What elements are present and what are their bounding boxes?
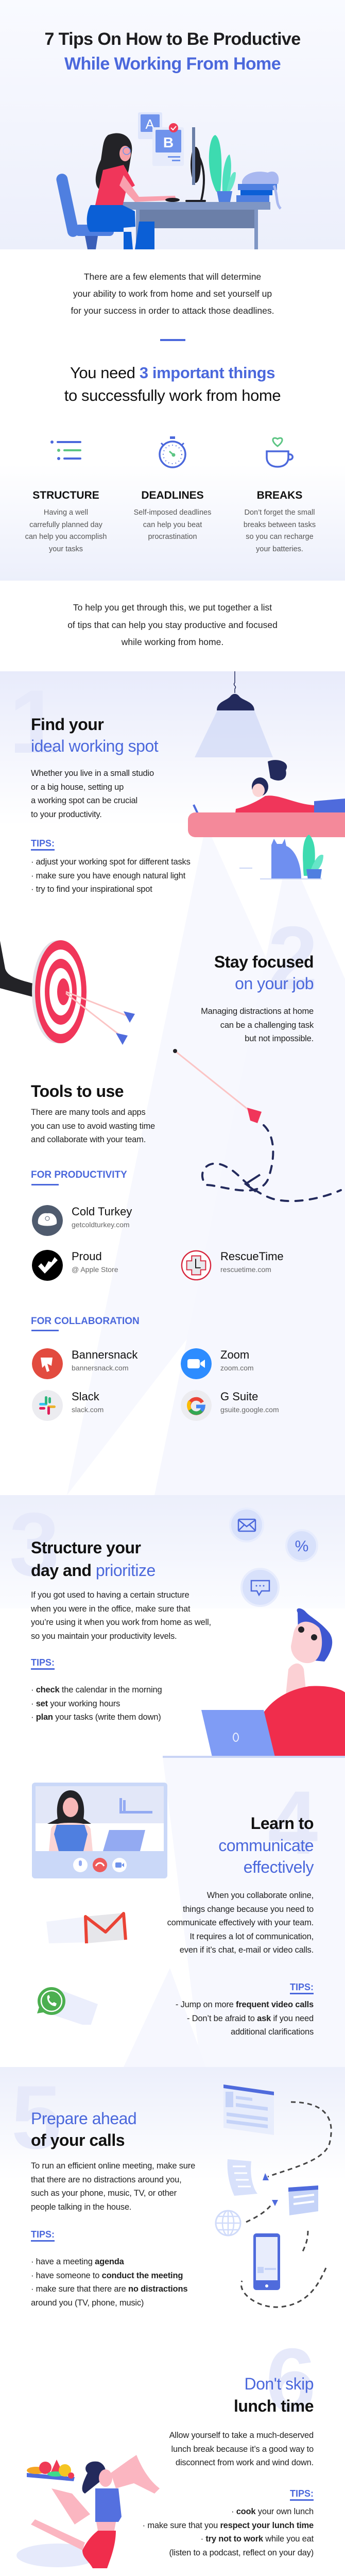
heading: three important things: to successfully work from home [64, 386, 281, 404]
illustration: devices with dashed paths [206, 2081, 345, 2313]
icon: gmail [41, 1909, 129, 1947]
tips list: · set your working hours [31, 1699, 120, 1708]
tips list [143, 2505, 314, 2560]
tips: tip 5 [31, 2229, 206, 2311]
text: tip 1 body [31, 769, 154, 819]
intro text: There are a few elements that will determine [84, 272, 261, 282]
heading: tip 2: Stay focused [214, 953, 314, 971]
heading: tip 6: Don't skip [244, 2375, 314, 2393]
text: tip 5 body: people talking in the house. [31, 2202, 131, 2211]
heading: tip 6: lunch time [234, 2397, 314, 2415]
text: tip 5 body: that there are no distractions around you, [31, 2175, 181, 2184]
title: While Working From Home [64, 54, 281, 74]
tips label: TIPS: [290, 2488, 314, 2499]
text: tip 4 body: When you collaborate online, [207, 1891, 314, 1900]
tips list: · try to find your inspirational spot [31, 885, 152, 894]
description: your tasks [49, 545, 83, 553]
background: triangles pattern 2 [124, 1969, 206, 2067]
label: STRUCTURE [32, 489, 99, 501]
tool: cold turkey: getcoldturkey.com [72, 1221, 130, 1229]
heading: tip 2: on your job [235, 974, 314, 993]
tips list: (listen to a podcast, reflect on your day) [169, 2548, 314, 2557]
tips list: · make sure that you respect your lunch time [143, 2520, 314, 2530]
background: section 5 [0, 2067, 345, 2180]
tool: rescuetime: rescuetime.com [220, 1265, 271, 1274]
tool: cold turkey: Cold Turkey [72, 1205, 132, 1218]
text: tip 2 body: Managing distractions at home [201, 1007, 314, 1016]
tips list [31, 1685, 162, 1722]
text: tips list intro [67, 602, 278, 647]
divider [160, 339, 185, 341]
icon: list [50, 440, 81, 460]
tool: zoom: zoom.com [220, 1364, 254, 1372]
illustration: video call [32, 1783, 167, 1878]
tool: proud: @ Apple Store [72, 1265, 118, 1274]
intro text: for your success in order to attack those deadlines. [71, 306, 274, 316]
heading: tip 1: ideal working spot [31, 737, 158, 755]
heading: tip 4: effectively [244, 1858, 314, 1876]
background: section 3 [0, 1495, 345, 1608]
icon: whatsapp [33, 1984, 106, 2025]
heading: tip 5: Prepare ahead [31, 2109, 136, 2128]
intro text: your ability to work from home and set yourself up [73, 289, 272, 299]
tool: rescuetime: RescueTime [220, 1250, 284, 1263]
description: your batteries. [256, 545, 303, 553]
tips list: around you (TV, phone, music) [31, 2298, 144, 2307]
heading: tip 3: day and prioritize [31, 1561, 156, 1580]
title [44, 29, 301, 74]
heading: tip 6 [234, 2373, 314, 2417]
tool: slack: Slack [72, 1390, 99, 1403]
tool: g suite: G Suite [220, 1390, 258, 1403]
subheading: for productivity: FOR PRODUCTIVITY [31, 1170, 127, 1180]
tips list: · have a meeting agenda [31, 2257, 124, 2266]
item: breaks [244, 437, 316, 553]
number 3: 3 [9, 1495, 59, 1595]
text: tip 6 body: Allow yourself to take a much-deserved [169, 2431, 314, 2440]
text: tips list intro: To help you get through this, we put together a list [73, 602, 272, 613]
description: procrastination [148, 533, 197, 541]
tips list: · adjust your working spot for different tasks [31, 857, 191, 867]
text: tips list intro: of tips that can help you stay productive and focused [67, 619, 278, 630]
background: triangles pattern 1 [154, 879, 345, 1495]
heading: tip 2 [214, 953, 314, 993]
hero illustration: woman at desk [56, 112, 282, 249]
tool: slack: slack.com [72, 1405, 104, 1414]
background: section 1 [0, 671, 345, 826]
tips label: TIPS: [31, 2229, 55, 2240]
description: can help you beat [143, 520, 202, 529]
text: tools body: you can use to avoid wasting time [31, 1121, 155, 1130]
tips list [31, 857, 191, 894]
tool: proud [32, 1250, 118, 1281]
text: tip 3 body: when you were in the office, make sure that [31, 1604, 190, 1614]
description [134, 509, 211, 541]
heading: tip 4: communicate [218, 1836, 314, 1855]
text: tip 3 body: If you got used to having a certain structure [31, 1590, 189, 1600]
text: tip 1 body: a working spot can be crucial [31, 796, 137, 805]
heading: tip 3: Structure your [31, 1538, 141, 1557]
tool: zoom: Zoom [220, 1348, 249, 1361]
heading: tip 1 [31, 715, 159, 755]
icons: email, percent, chat bubbles and man with laptop: % [295, 1538, 308, 1555]
text: tip 3 body: you’re using it when you work from home as well, [31, 1618, 211, 1627]
subheading: for productivity [31, 1170, 127, 1185]
heading: tip 4 [218, 1814, 314, 1876]
tips label: TIPS: [290, 1982, 314, 1992]
text: tip 2 body: can be a challenging task [220, 1020, 314, 1029]
tool: zoom [181, 1348, 254, 1379]
text: tip 3 body [31, 1590, 211, 1640]
tips list: - Don’t be afraid to ask if you need [187, 2013, 314, 2023]
tool: g suite: gsuite.google.com [220, 1405, 279, 1414]
number 6: 6 [266, 2330, 316, 2431]
text: tip 2 body: but not impossible. [245, 1034, 314, 1043]
number 5: 5 [11, 2067, 61, 2168]
description: breaks between tasks [244, 520, 316, 529]
number 4: 4 [268, 1773, 318, 1873]
text: tip 4 body: communicate effectively with your team. [167, 1918, 314, 1927]
tips label: TIPS: [31, 838, 55, 849]
icon: cup with heart [266, 437, 294, 468]
tips list: · make sure you have enough natural light [31, 871, 185, 880]
icons: email, percent, chat bubbles and man with laptop [163, 1510, 345, 1758]
illustration: target with arrows [0, 940, 342, 1202]
text: tools body: and collaborate with your team. [31, 1135, 146, 1144]
tips list: · have someone to conduct the meeting [31, 2271, 183, 2280]
text: tip 3 body: so you maintain your productivity levels. [31, 1631, 177, 1640]
tips: tip 6 [129, 2488, 314, 2560]
tool: rescuetime [181, 1250, 284, 1281]
tips: tip 3 [31, 1657, 162, 1722]
tips list: · make sure that there are no distractions [31, 2284, 187, 2294]
tool: bannersnack: bannersnack.com [72, 1364, 129, 1372]
item: structure [25, 440, 107, 553]
heading: three important things [64, 364, 281, 404]
heading: tip 5: of your calls [31, 2131, 125, 2149]
background: three things band [0, 464, 345, 581]
text: tip 4 body: things change because you need to [183, 1904, 314, 1913]
tips list: · cook your own lunch [231, 2507, 314, 2516]
hero illustration: woman at desk: A [145, 116, 154, 132]
heading: tip 5 [31, 2108, 136, 2151]
text: tip 4 body [167, 1889, 314, 1957]
label: DEADLINES [141, 489, 204, 501]
description: Having a well [44, 509, 88, 517]
tips list [176, 1998, 314, 2039]
tips list: · check the calendar in the morning [31, 1685, 162, 1694]
heading: tip 4: Learn to [251, 1814, 314, 1833]
background: hero [0, 0, 345, 249]
text: tip 6 body: lunch break because it’s a good way to [171, 2444, 314, 2453]
item: deadlines [134, 436, 211, 541]
description: carrefully planned day [29, 520, 102, 529]
tips label: TIPS: [31, 1657, 55, 1668]
text: tip 4 body: It requires a lot of communication, [189, 1932, 314, 1941]
heading: tip 1: Find your [31, 715, 104, 734]
description: so you can recharge [246, 533, 314, 541]
tips list [31, 2255, 187, 2310]
tips list: · try not to work while you eat [201, 2534, 314, 2544]
subheading: for collaboration: FOR COLLABORATION [31, 1316, 140, 1327]
tool: slack [32, 1390, 104, 1421]
hero illustration: woman at desk: B [163, 134, 174, 150]
text: tools body [31, 1108, 155, 1144]
title: 7 Tips On How to Be Productive [44, 29, 301, 49]
description [25, 509, 107, 553]
text: tip 5 body [31, 2159, 195, 2214]
text: tips list intro: while working from home. [122, 637, 223, 647]
intro text [71, 272, 274, 316]
tool: bannersnack [32, 1348, 138, 1379]
tool: bannersnack: Bannersnack [72, 1348, 137, 1361]
heading: three important things: You need 3 important things [70, 364, 275, 382]
number 1: 1 [9, 672, 59, 772]
tool: proud: Proud [72, 1250, 102, 1263]
text: tip 4 body: even if it’s chat, e-mail or video calls. [180, 1945, 314, 1955]
text: tip 2 body [201, 1007, 314, 1043]
text: tip 5 body: To run an efficient online meeting, make sure [31, 2161, 195, 2171]
description: Don’t forget the small [244, 509, 315, 517]
label: BREAKS [257, 489, 302, 501]
text: tip 1 body: or a big house, setting up [31, 782, 124, 791]
text: tip 5 body: such as your phone, music, TV, or other [31, 2189, 177, 2198]
text: tools body: There are many tools and apps [31, 1108, 146, 1117]
text: tip 6 body [169, 2429, 314, 2470]
description [244, 509, 316, 553]
text: tip 1 body: Whether you live in a small studio [31, 769, 154, 778]
number 2: 2 [268, 908, 318, 1009]
heading: tip 3 [31, 1538, 156, 1580]
tips list: additional clarifications [231, 2027, 314, 2037]
tips: tip 4 [154, 1981, 314, 2038]
illustration: woman eating fruit [15, 2354, 165, 2571]
text: tip 1 body: to your productivity. [31, 810, 102, 819]
tips list: - Jump on more frequent video calls [176, 2000, 314, 2009]
tips: tip 1 [31, 838, 191, 894]
icon: stopwatch [159, 436, 186, 468]
tool: cold turkey [32, 1205, 132, 1236]
heading: tools to use: Tools to use [31, 1082, 124, 1100]
text: tip 6 body: disconnect from work and wind down. [176, 2458, 314, 2467]
description: can help you accomplish [25, 533, 107, 541]
tool: g suite [181, 1390, 279, 1421]
illustration: lamp and woman on sofa [188, 671, 345, 879]
tips list: · plan your tasks (write them down) [31, 1713, 161, 1722]
description: Self-imposed deadlines [134, 509, 211, 517]
